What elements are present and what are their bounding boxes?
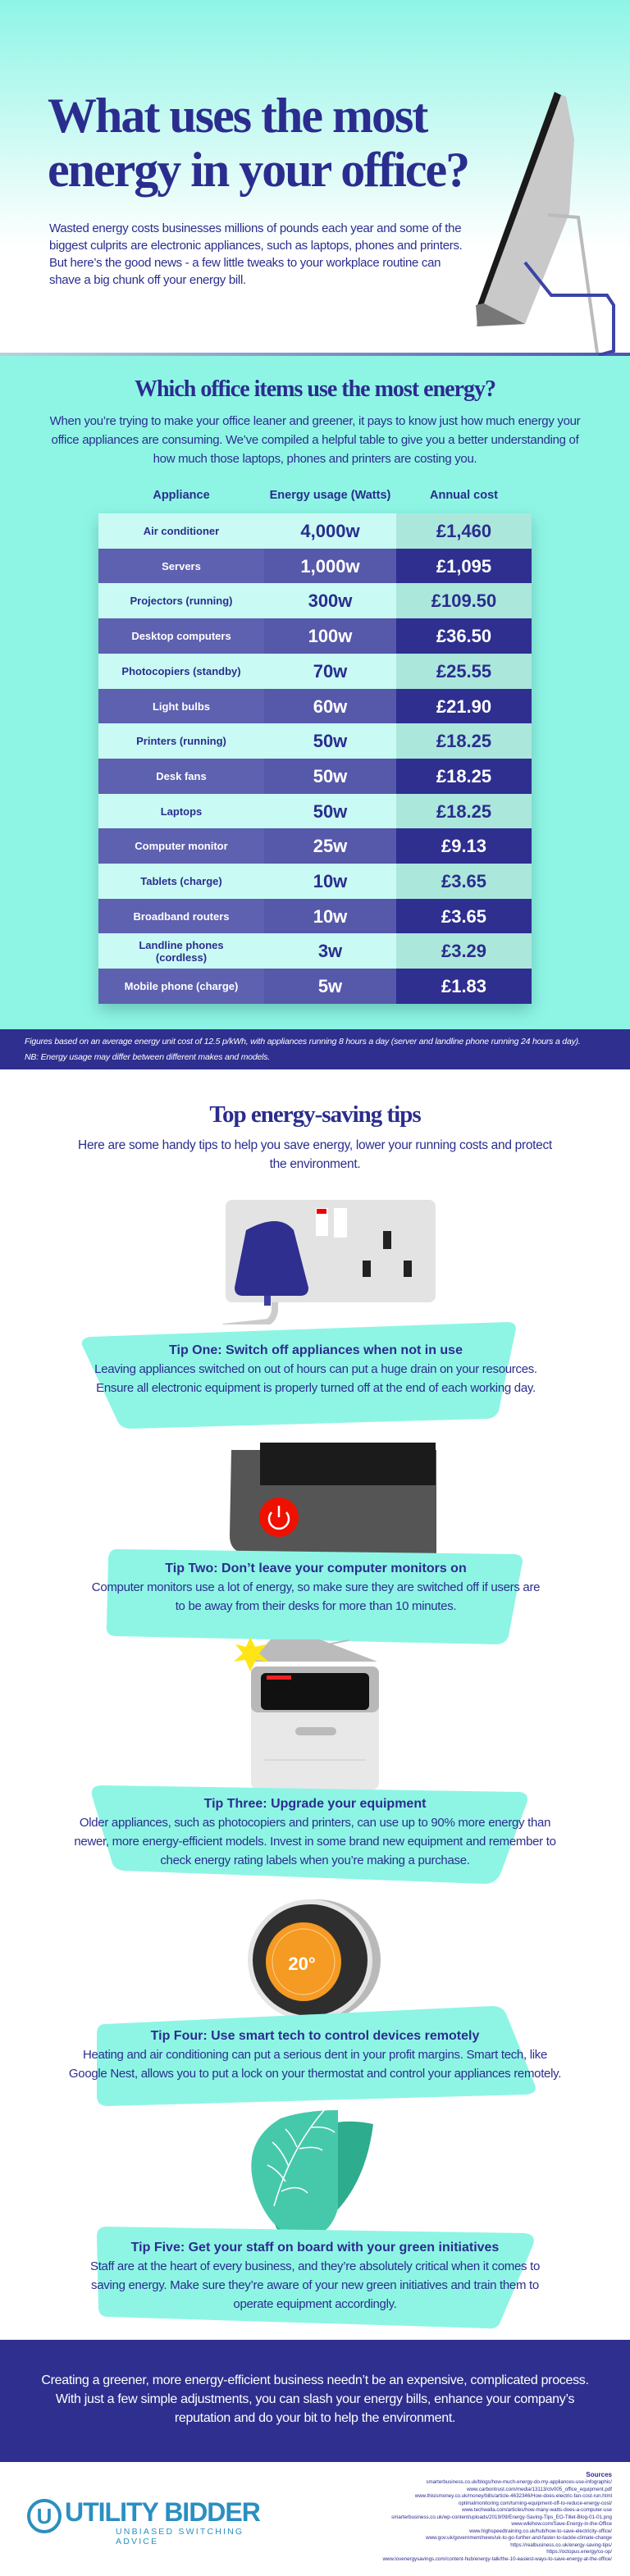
sources: Sources — [586, 2471, 612, 2478]
sources: www.highspeedtraining.co.uk/hub/how-to-save-electricity-office/ — [469, 2528, 612, 2534]
tip one text: Tip One: Switch off appliances when not in use — [169, 1343, 463, 1357]
closing band — [0, 2340, 630, 2462]
tip three text: Tip Three: Upgrade your equipment — [204, 1797, 426, 1811]
table: energy usage: 1,000w — [300, 556, 360, 577]
heading: top tips: Top energy-saving tips — [209, 1101, 421, 1128]
logo: utility bidder: U — [37, 2504, 52, 2528]
table: energy usage: 4,000w — [300, 521, 360, 541]
panel: tip five — [97, 2227, 534, 2329]
footnote band — [0, 1029, 630, 1069]
table: energy usage: £25.55 — [436, 661, 491, 682]
tip four text: Heating and air conditioning can put a serious dent in your profit margins. Smart tech, like — [83, 2048, 547, 2062]
tip two text — [92, 1562, 540, 1613]
tip three text: Older appliances, such as photocopiers and printers, can use up to 90% more energy than — [80, 1816, 550, 1830]
table: energy usage: £18.25 — [436, 801, 491, 822]
tip two text: Tip Two: Don’t leave your computer monitors on — [165, 1562, 467, 1575]
sources: smarterbusiness.co.uk/blogs/how-much-energy-do-my-appliances-use-infographic/ — [426, 2479, 612, 2485]
closing band: Creating a greener, more energy-efficient business needn’t be an expensive, complicated process. With just a few simple adjustments, you can slash your energy bills, enhance your company’s reputation and do your bit to help the environment. — [41, 2373, 589, 2425]
header background — [0, 0, 630, 356]
table header: Appliance — [153, 489, 210, 502]
table: energy usage: £1,460 — [436, 521, 491, 541]
table: energy usage: (cordless) — [156, 951, 207, 964]
tip five text — [90, 2241, 540, 2311]
tip one text: Ensure all electronic equipment is properly turned off at the end of each working day. — [96, 1381, 536, 1395]
tip one text: Leaving appliances switched on out of hours can put a huge drain on your resources. — [94, 1362, 537, 1376]
sources — [382, 2471, 612, 2562]
logo: utility bidder: UNBIASED SWITCHING ADVICE — [116, 2527, 244, 2546]
table: energy usage: £21.90 — [436, 695, 491, 717]
table: energy usage: £3.65 — [441, 906, 486, 927]
table: energy usage — [98, 513, 532, 1004]
table: energy usage: 25w — [313, 836, 347, 856]
table: energy usage: £1,095 — [436, 556, 491, 577]
table: energy usage: Printers (running) — [136, 735, 226, 747]
table: energy usage: 10w — [313, 906, 347, 927]
table: energy usage: £3.29 — [441, 941, 486, 961]
sources: www.techwalla.com/articles/how-many-watts-does-a-computer-use — [462, 2507, 612, 2513]
tip five text: saving energy. Make sure they’re aware of your new green initiatives and train them to — [91, 2278, 539, 2292]
table: energy usage: Broadband routers — [133, 910, 230, 923]
icon: desktop monitor — [476, 92, 615, 356]
table: energy usage: Light bulbs — [153, 700, 210, 712]
table: energy usage: Photocopiers (standby) — [121, 665, 241, 677]
logo: utility bidder — [27, 2497, 261, 2546]
sources: smarterbusiness.co.uk/wp-content/uploads/2019/09/Energy-Saving-Tips_EO-Tillet-Blog-01-01.png — [391, 2514, 612, 2519]
table: energy usage: 60w — [313, 695, 347, 717]
table: energy usage: 50w — [313, 731, 347, 751]
sources: www.carbontrust.com/media/13113/ctv005_office_equipment.pdf — [467, 2487, 612, 2492]
text: table intro: When you’re trying to make your office leaner and greener, it pays to know just how much energy your office appliances are consuming. We’ve compiled a helpful table to give you a better understanding of how much those laptops, phones and printers are costing you. — [50, 414, 580, 466]
table: energy usage: £109.50 — [431, 590, 496, 611]
tip three text: check energy rating labels when you’re making a purchase. — [160, 1853, 470, 1867]
section: table background — [0, 356, 630, 1029]
footnote band: NB: Energy usage may differ between different makes and models. — [25, 1052, 270, 1062]
table: energy usage: £3.65 — [441, 871, 486, 891]
table: energy usage: £18.25 — [436, 731, 491, 751]
table: energy usage: Mobile phone (charge) — [125, 980, 238, 992]
table header: Energy usage (Watts) — [270, 489, 390, 502]
table: energy usage: Servers — [162, 560, 201, 572]
panel: tip one — [82, 1322, 537, 1429]
tip five text: operate equipment accordingly. — [233, 2297, 397, 2311]
text: tips intro: Here are some handy tips to help you save energy, lower your running costs and protect the environment. — [78, 1138, 552, 1171]
table: energy usage: 3w — [318, 941, 342, 961]
table: energy usage: £9.13 — [441, 836, 486, 856]
table: energy usage: Desktop computers — [131, 630, 231, 642]
title: What uses the most energy in your office? — [48, 89, 468, 197]
table: energy usage: Air conditioner — [144, 525, 219, 537]
panel: tip three — [92, 1785, 527, 1884]
table: energy usage: Projectors (running) — [130, 595, 232, 607]
sources: www.thisismoney.co.uk/money/bills/article-4632346/How-does-electric-fan-cost-run.html — [415, 2493, 612, 2499]
icon: leaf — [251, 2110, 373, 2231]
tip three text — [74, 1797, 556, 1867]
table: energy usage: Landline phones — [139, 939, 224, 951]
intro text: Wasted energy costs businesses millions of pounds each year and some of the biggest culprits are electronic appliances, such as laptops, phones and printers. But here’s the good news - a few little tweaks to your workplace routine can shave a big chunk off your energy bill. — [49, 221, 463, 287]
panel: tip two — [92, 1549, 540, 1644]
tip two text: to be away from their desks for more than 10 minutes. — [176, 1599, 456, 1613]
logo: utility bidder: UTILITY BIDDER — [65, 2497, 260, 2527]
table: energy usage: Desk fans — [156, 770, 207, 782]
tip two text: Computer monitors use a lot of energy, so make sure they are switched off if users are — [92, 1580, 540, 1594]
sources: www.gov.uk/government/news/uk-to-go-further-and-faster-to-tackle-climate-change — [426, 2535, 612, 2541]
tip five text: Staff are at the heart of every business, and they’re absolutely critical when it comes to — [90, 2259, 540, 2273]
table: energy usage: Tablets (charge) — [140, 875, 222, 887]
tip four text — [69, 2029, 561, 2081]
table: energy usage: 50w — [313, 766, 347, 786]
table: energy usage: £1.83 — [441, 976, 486, 996]
sources: https://octopus.energy/co-op/ — [546, 2549, 612, 2555]
icon: plug socket — [223, 1200, 436, 1324]
table: energy usage: £36.50 — [436, 626, 491, 646]
icon: photocopier — [234, 1637, 379, 1790]
table: energy usage: 100w — [308, 626, 352, 646]
table: energy usage: 5w — [318, 976, 342, 996]
sources: optimalmonitoring.com/turning-equipment-off-to-reduce-energy-cost/ — [459, 2500, 612, 2506]
icon: monitor power — [230, 1443, 436, 1553]
table: energy usage: 70w — [313, 661, 347, 682]
table: energy usage: Computer monitor — [135, 840, 228, 852]
tip four text: Google Nest, allows you to put a lock on your thermostat and control your appliances remotely. — [69, 2067, 561, 2081]
table: energy usage: £18.25 — [436, 766, 491, 786]
header accent line — [0, 353, 630, 356]
footnote band: Figures based on an average energy unit cost of 12.5 p/kWh, with appliances running 8 hours a day (server and landline phone running 24 hours a day). — [25, 1037, 581, 1046]
icon: thermostat: 20° — [288, 1954, 316, 1974]
table header — [153, 489, 498, 502]
tip one text — [94, 1343, 537, 1395]
tip four text: Tip Four: Use smart tech to control devices remotely — [151, 2029, 479, 2043]
icon: thermostat — [248, 1899, 381, 2016]
sources: www.lovenergysavings.com/content-hub/energy-talk/the-10-easiest-ways-to-save-energy-at-the-office/ — [383, 2555, 612, 2562]
heading: which office items: Which office items use the most energy? — [135, 376, 495, 402]
tip three text: newer, more energy-efficient models. Invest in some brand new equipment and remember to — [74, 1835, 556, 1849]
sources: https://realbusiness.co.uk/energy-saving-tips/ — [510, 2542, 612, 2547]
table header: Annual cost — [430, 489, 498, 502]
tip five text: Tip Five: Get your staff on board with your green initiatives — [131, 2241, 499, 2255]
sources: www.wikihow.com/Save-Energy-in-the-Office — [511, 2521, 612, 2527]
table: energy usage: 10w — [313, 871, 347, 891]
table: energy usage: 50w — [313, 801, 347, 822]
table: energy usage: 300w — [308, 590, 352, 611]
table: energy usage: Laptops — [161, 805, 202, 818]
panel: tip four — [97, 2006, 536, 2106]
